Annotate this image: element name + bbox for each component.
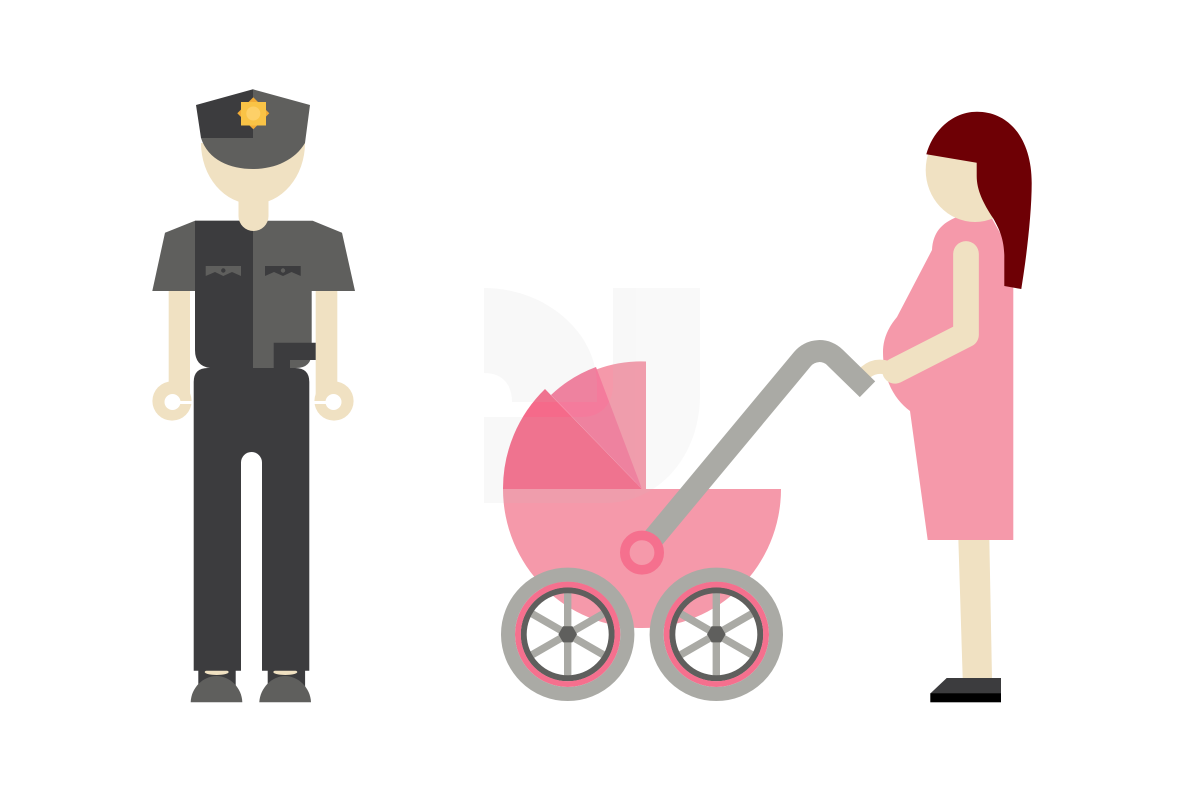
dress bbox=[883, 215, 1013, 540]
police cap bbox=[196, 89, 310, 169]
trousers bbox=[194, 368, 309, 671]
hand bbox=[866, 367, 895, 372]
arm bbox=[895, 254, 966, 371]
left arm and hand bbox=[152, 285, 192, 421]
baby stroller bbox=[484, 288, 868, 694]
neck bbox=[238, 195, 268, 231]
holster bbox=[274, 343, 316, 369]
hood panel middle bbox=[551, 367, 642, 489]
leg bbox=[958, 538, 992, 678]
faint watermark bbox=[484, 288, 700, 503]
hair bbox=[926, 112, 1032, 289]
face bbox=[926, 118, 1024, 222]
pregnant woman bbox=[866, 112, 1032, 702]
shirt bbox=[152, 221, 355, 368]
right shoe and sock bbox=[259, 668, 311, 702]
right wheel bbox=[657, 575, 776, 694]
left shoe and sock bbox=[191, 668, 242, 702]
right arm and hand bbox=[314, 285, 354, 421]
head bbox=[201, 143, 305, 204]
right pocket bbox=[265, 266, 301, 276]
left wheel bbox=[508, 575, 627, 694]
hood panel front bbox=[503, 389, 642, 489]
pivot ring bbox=[625, 535, 659, 570]
cap badge bbox=[237, 97, 269, 129]
left pocket bbox=[206, 266, 241, 276]
handle bbox=[642, 351, 868, 552]
shoe bbox=[930, 678, 1001, 702]
hood panel back bbox=[590, 361, 646, 489]
police officer bbox=[152, 89, 355, 702]
stroller basket bbox=[503, 489, 781, 628]
